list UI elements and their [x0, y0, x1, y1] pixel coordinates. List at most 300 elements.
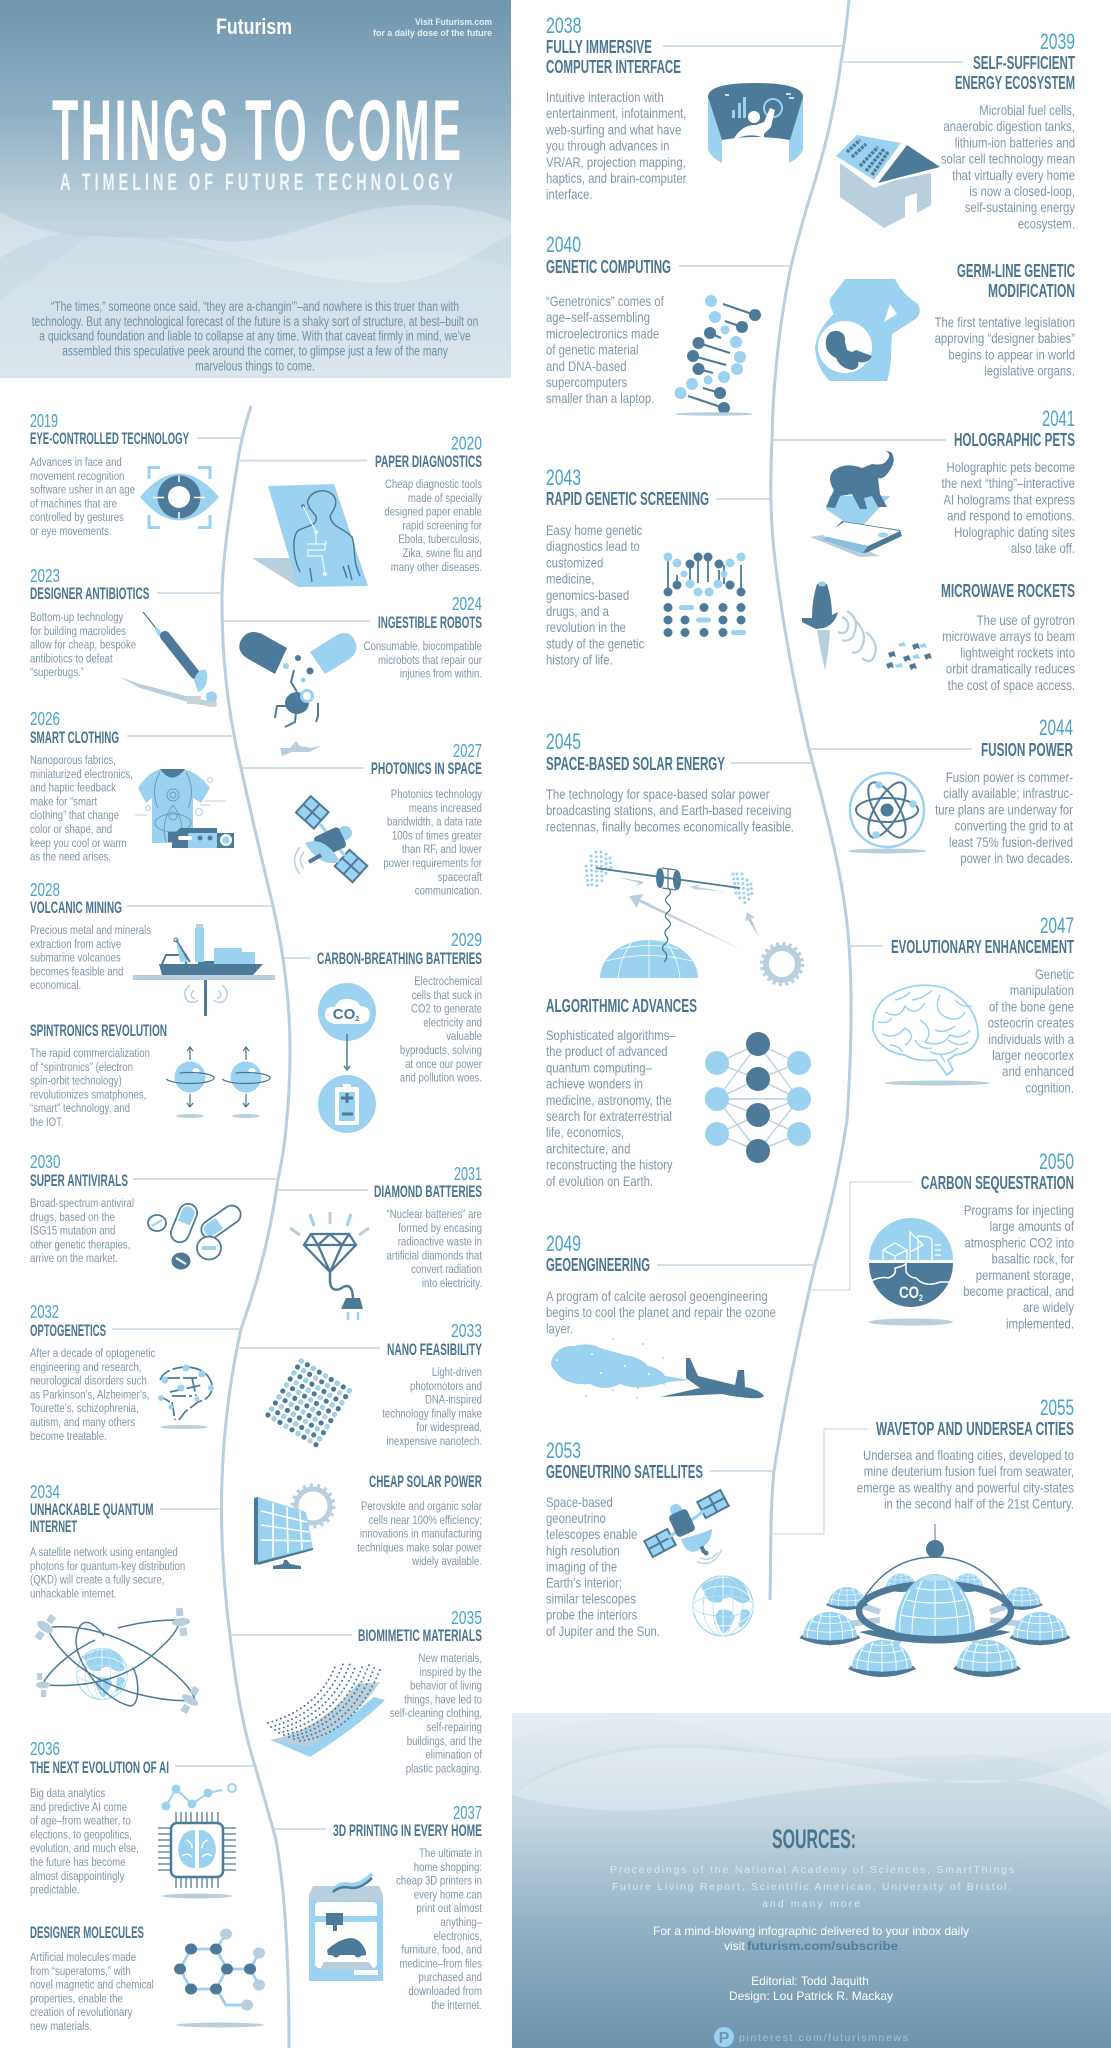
body text: properties, enable the [30, 1992, 123, 2006]
body text: almost disappointingly [30, 1870, 125, 1883]
body text: genomics-based [546, 588, 629, 603]
body text: mine deuterium fusion fuel from seawater, [864, 1464, 1074, 1479]
year and title [546, 1438, 703, 1482]
year and title [30, 879, 122, 917]
body text: of machines that are [30, 497, 117, 511]
body text: Artificial molecules made [30, 1951, 136, 1964]
body text [546, 1289, 776, 1337]
connector [112, 1328, 241, 1330]
body text: of Jupiter and the Sun. [546, 1624, 660, 1639]
body text: individuals with a [988, 1032, 1074, 1047]
body text: Light-driven [432, 1366, 482, 1379]
body text: imaging of the [546, 1559, 617, 1575]
connector [841, 61, 963, 63]
item: 2026 smart clothing [30, 708, 234, 864]
icon: quantum network globe [30, 1607, 205, 1717]
body text: Bottom-up technology [30, 611, 124, 624]
body text: movement recognition [30, 470, 124, 483]
year and title [30, 1151, 128, 1190]
body text: means increased [409, 802, 482, 815]
connector [849, 945, 883, 947]
icon: eye [140, 468, 219, 528]
body text: predictable. [30, 1884, 80, 1897]
year and title: 2020 [451, 432, 482, 454]
body text [546, 523, 644, 668]
body text: and enhanced [1002, 1064, 1074, 1079]
body text: cells near 100% efficiency; [369, 1514, 482, 1527]
body text [30, 754, 133, 864]
body text: osteocrin creates [988, 1016, 1074, 1031]
body text: reconstructing the history [546, 1158, 673, 1173]
credits: Editorial: Todd Jaquith [751, 1974, 869, 1988]
body text: New materials, [419, 1652, 482, 1665]
body text: lithium-ion batteries and [955, 135, 1075, 151]
body text: software usher in an age [30, 484, 135, 497]
body text [30, 924, 152, 993]
item: 2044 fusion power [809, 715, 1073, 866]
body text: smaller than a laptop. [546, 391, 654, 406]
body text: widely available. [411, 1555, 482, 1569]
year and title: THE NEXT EVOLUTION OF AI [30, 1759, 169, 1777]
body text: microelectronics made [546, 326, 659, 342]
body text: solar cell technology mean [941, 152, 1075, 167]
body text: color or shape, and [30, 823, 112, 836]
item: 2030 super antivirals [30, 1151, 278, 1270]
icon: solar house [836, 135, 940, 228]
body text: of “spintronics” (electron [30, 1061, 133, 1074]
year and title [955, 29, 1075, 93]
body text: Space-based [546, 1495, 613, 1510]
body text: Undersea and floating cities, developed to [863, 1448, 1074, 1463]
icon: neural brain [158, 1364, 214, 1429]
year and title: 2050 [1039, 1149, 1074, 1174]
body text: self-repairing [427, 1721, 482, 1734]
year and title [921, 1149, 1074, 1193]
year and title [375, 432, 482, 471]
body text: rectennas, finally becomes economically feasible. [546, 819, 794, 835]
item: 2032 optogenetics [30, 1301, 241, 1443]
body text: furniture, food, and [401, 1944, 482, 1957]
year and title [891, 913, 1074, 957]
sources text: and many more [762, 1898, 860, 1910]
body text: rapid screening for [403, 519, 482, 533]
body text: as Parkinson’s, Alzheimer’s, [30, 1388, 149, 1402]
body text: spin-orbit technology) [30, 1075, 122, 1088]
body text: large amounts of [990, 1219, 1074, 1234]
body text: Holographic pets become [947, 460, 1075, 475]
body text: other genetic therapies, [30, 1238, 130, 1252]
year and title: DIAMOND BATTERIES [374, 1183, 482, 1201]
icon: electron spin spheres [166, 1047, 270, 1118]
icon: carbon sequestration: 2 [919, 1293, 923, 1303]
body text: probe the interiors [546, 1608, 637, 1623]
item: 2031 diamond batteries [278, 1163, 482, 1320]
body text: valuable [446, 1030, 482, 1044]
body text: drugs, based on the [30, 1211, 115, 1224]
body text: that virtually every home [952, 168, 1075, 183]
icon: genomic dot matrix [664, 552, 746, 637]
body text [546, 787, 794, 835]
item: designer molecules [30, 1924, 265, 2033]
body text: become treatable. [30, 1430, 107, 1443]
year and title: 2038 [546, 13, 582, 38]
year and title [876, 1395, 1074, 1439]
body text: inexpensive nanotech. [387, 1435, 482, 1448]
body text: manipulation [1010, 983, 1074, 998]
body text: at once our power [405, 1058, 482, 1071]
body text: formed by encasing [398, 1222, 482, 1235]
heading: sources: SOURCES: [772, 1824, 856, 1854]
intro text: a quicksand foundation and liable to collapse at any time. With that caveat firmly in mind, we’ve [39, 328, 471, 344]
year and title: 2044 [1039, 715, 1073, 740]
connector [133, 1178, 278, 1180]
body text: or eye movements. [30, 525, 112, 538]
body text: techniques make solar power [357, 1541, 482, 1555]
body text: photons for quantum-key distribution [30, 1560, 185, 1573]
body text: home shopping: [414, 1861, 482, 1874]
year and title: 2030 [30, 1151, 60, 1172]
year and title: FULLY IMMERSIVE [546, 36, 652, 57]
body text: emerge as wealthy and powerful city-states [857, 1480, 1074, 1496]
body text: telescopes enable [546, 1527, 637, 1542]
body text [30, 1787, 139, 1897]
item: microwave rockets [802, 580, 1075, 693]
body text: “Genetronics” comes of [546, 294, 664, 309]
body text: and haptic feedback [30, 782, 116, 795]
icon: diamond plug [290, 1212, 369, 1320]
year and title [546, 729, 725, 774]
connector [241, 767, 364, 769]
body text: designed paper enable [384, 506, 482, 519]
item: 2041 holographic pets [772, 406, 1075, 557]
body text [382, 1366, 482, 1448]
icon: brain [873, 985, 990, 1086]
body text: Intuitive interaction with [546, 90, 664, 105]
year and title: EYE-CONTROLLED TECHNOLOGY [30, 430, 189, 448]
year and title: INTERNET [30, 1518, 77, 1536]
year and title: 2041 [1042, 406, 1075, 431]
year and title: COMPUTER INTERFACE [546, 56, 681, 77]
timeline spine: right column [770, 0, 851, 1600]
year and title: 2047 [1040, 913, 1074, 938]
subscribe callout [653, 1924, 969, 1953]
year and title [546, 1231, 650, 1275]
title: CHEAP SOLAR POWER [369, 1473, 482, 1491]
body text [857, 1448, 1074, 1512]
connector [772, 1429, 868, 1534]
intro text [32, 299, 478, 374]
year and title: GEONEUTRINO SATELLITES [546, 1461, 703, 1482]
connector [679, 265, 791, 267]
year and title: SPACE-BASED SOLAR ENERGY [546, 753, 725, 774]
body text: things, have led to [404, 1693, 482, 1707]
year and title: 2033 [451, 1320, 482, 1341]
body text: orbit dramatically reduces [946, 662, 1075, 677]
body text: age–self-assembling [546, 310, 650, 325]
body text: unhackable internet. [30, 1587, 116, 1601]
year and title: 2037 [453, 1802, 482, 1823]
year and title: 2031 [454, 1163, 482, 1184]
year and title: CARBON-BREATHING BATTERIES [317, 950, 482, 968]
year and title: DESIGNER ANTIBIOTICS [30, 585, 150, 603]
body text: “smart” technology, and [30, 1102, 130, 1116]
year and title [387, 1320, 482, 1359]
body text: buildings, and the [407, 1735, 482, 1748]
icon: holographic elephant on phone [810, 451, 902, 557]
title: THINGS TO COME [52, 83, 461, 179]
year and title: GENETIC COMPUTING [546, 256, 671, 277]
intro text: technology. But any technological forecast of the future is a shaky sort of structure, at best–built on [32, 314, 478, 329]
body text: diagnostics lead to [546, 539, 640, 554]
connector [160, 1508, 221, 1510]
body text: (QKD) will create a fully secure, [30, 1574, 164, 1587]
body text: arrive on the market. [30, 1252, 118, 1266]
body text: implemented. [1006, 1316, 1074, 1332]
item: algorithmic advances [546, 995, 811, 1189]
icon: smart shirt and camera [135, 769, 234, 848]
year and title: 3D PRINTING IN EVERY HOME [333, 1822, 482, 1840]
body text: After a decade of optogenetic [30, 1347, 156, 1360]
subscribe callout: futurism.com/subscribe [747, 1939, 898, 1953]
body text: allow for cheap, bespoke [30, 639, 136, 652]
body text: larger neocortex [992, 1048, 1075, 1063]
body text: of age–from weather, to [30, 1815, 131, 1828]
body text: converting the grid to at [955, 819, 1073, 834]
icon: pregnant silhouette with embryo [815, 279, 920, 381]
item: 2043 rapid genetic screening [546, 465, 771, 668]
item: 2027 photonics in space [241, 740, 483, 898]
body text: purchased and [419, 1971, 482, 1985]
body text: Big data analytics [30, 1787, 106, 1800]
year and title [30, 708, 119, 747]
body text: for building macrolides [30, 625, 126, 638]
body text: supercomputers [546, 375, 627, 390]
year and title: 2040 [546, 232, 581, 257]
year and title [546, 465, 709, 509]
year and title: PHOTONICS IN SPACE [371, 760, 482, 778]
body text [942, 460, 1075, 556]
body text [390, 1652, 483, 1776]
body text: innovations in manufacturing [360, 1528, 482, 1541]
year and title: SMART CLOTHING [30, 729, 119, 747]
body text: technology finally make [382, 1407, 482, 1421]
body text: “Nuclear batteries” are [387, 1208, 482, 1221]
year and title: 2029 [451, 929, 482, 950]
body text: elimination of [425, 1749, 483, 1762]
body text: Perovskite and organic solar [361, 1500, 482, 1513]
body text: VR/AR, projection mapping, [546, 155, 686, 170]
item: 2039 self-sufficient energy ecosystem [836, 29, 1076, 232]
title [957, 260, 1075, 301]
item: 2036 next evolution of AI [30, 1738, 255, 1898]
pinterest link [714, 2027, 908, 2047]
icon: biomimetic sheet [268, 1664, 385, 1757]
body text: Sophisticated algorithms– [546, 1028, 676, 1043]
body text: the cost of space access. [948, 678, 1075, 693]
connector [657, 1264, 815, 1266]
body text: The use of gyrotron [977, 613, 1075, 628]
year and title [378, 593, 482, 632]
connector [731, 762, 812, 764]
body text: lightweight rockets into [960, 645, 1075, 661]
year and title: 2036 [30, 1738, 60, 1759]
item: cheap solar power [254, 1473, 482, 1569]
body text [545, 90, 686, 202]
body text: high resolution [546, 1543, 620, 1559]
year and title: BIOMIMETIC MATERIALS [358, 1627, 482, 1645]
year and title: 2032 [30, 1301, 59, 1322]
body text: Ebola, tuberculosis, [398, 533, 482, 547]
body text: make for “smart [30, 795, 97, 809]
body text: atmospheric CO2 into [964, 1235, 1074, 1251]
body text: least 75% fusion-derived [949, 835, 1073, 850]
item: 2037 3D printing in every home [274, 1802, 483, 2012]
connector [278, 1189, 368, 1191]
body text: autism, and many others [30, 1416, 136, 1429]
year and title: 2034 [30, 1481, 60, 1502]
subscribe callout: For a mind-blowing infographic delivered to your inbox daily [653, 1924, 969, 1938]
item: 2029 carbon-breathing batteries [284, 929, 482, 1133]
body text [30, 1951, 154, 2033]
body text: neurological disorders such [30, 1375, 147, 1388]
item: germ-line genetic modification [815, 260, 1075, 381]
body text [400, 975, 482, 1085]
body text: and predictive AI come [30, 1801, 127, 1814]
body text: and DNA-based [546, 359, 627, 374]
icon: CO2 to battery: CO [333, 1006, 355, 1023]
body text [383, 788, 483, 898]
body text: injuries from within. [400, 668, 482, 681]
body text: for widespread, [416, 1421, 482, 1435]
icon: space solar station [586, 852, 802, 984]
body text: of genetic material [546, 343, 639, 358]
icon: mining ship [133, 924, 275, 1016]
body text: anything– [440, 1916, 483, 1929]
body text: keep you cool or warm [30, 837, 127, 850]
body text: miniaturized electronics, [30, 768, 133, 781]
year and title: 2043 [546, 465, 581, 490]
icon: neural network [705, 1032, 811, 1163]
year and title [30, 1738, 169, 1777]
body text: The rapid commercialization [30, 1047, 150, 1060]
body text: begins to cool the planet and repair the ozone [546, 1305, 776, 1320]
icon: capsule and microbot [239, 632, 356, 756]
body text: than RF, and lower [402, 843, 482, 857]
panel: footer [512, 1713, 1111, 2048]
body text: approving “designer babies” [935, 331, 1075, 346]
sources text: Future Living Report, Scientific American, University of Bristol, [612, 1881, 1011, 1893]
body text: Holographic dating sites [954, 525, 1075, 540]
body text: AI holograms that express [943, 492, 1075, 508]
body text: interface. [546, 187, 593, 202]
pinterest link: P [719, 2030, 730, 2047]
body text: becomes feasible and [30, 965, 123, 979]
visit link: for a daily dose of the future [373, 28, 492, 38]
body text: ecosystem. [1018, 216, 1075, 232]
icon: immersive display [708, 83, 803, 163]
icon: floating city [799, 1524, 1071, 1677]
item: 2024 ingestible robots [224, 593, 482, 756]
body text: The first tentative legislation [935, 315, 1075, 330]
item: 2049 geoengineering [546, 1231, 815, 1399]
body text: Consumable, biocompatible [364, 640, 482, 653]
body text: The ultimate in [419, 1847, 482, 1860]
body text: begins to appear in world [948, 347, 1075, 363]
year and title: UNHACKABLE QUANTUM [30, 1501, 154, 1519]
icon: syringe [120, 612, 217, 707]
item: 2034 unhackable quantum internet [30, 1481, 221, 1717]
body text: geoneutrino [546, 1511, 606, 1526]
connector [239, 1347, 380, 1349]
year and title: 2027 [453, 740, 482, 761]
body text: creation of revolutionary [30, 2006, 133, 2020]
year and title: NANO FEASIBILITY [387, 1341, 482, 1359]
body text: permanent storage, [976, 1268, 1074, 1283]
body text: elections, to geopolitics, [30, 1828, 132, 1842]
year and title: RAPID GENETIC SCREENING [546, 488, 709, 509]
body text: 100s of times greater [392, 829, 482, 843]
body text: Precious metal and minerals [30, 924, 152, 937]
item: 2055 wavetop and undersea cities [772, 1395, 1074, 1677]
body text [935, 315, 1075, 379]
connector [224, 620, 370, 622]
year and title: 2053 [546, 1438, 581, 1463]
item: 2020 paper diagnostics [238, 432, 483, 587]
body text: are widely [1023, 1300, 1075, 1315]
body text: new materials. [30, 2020, 92, 2033]
year and title [371, 740, 482, 778]
body text: you through advances in [546, 139, 669, 154]
body text: and respond to emotions. [947, 509, 1075, 524]
body text: web-surfing and what have [545, 122, 681, 138]
body text: Broad-spectrum antiviral [30, 1197, 134, 1210]
body text [30, 456, 135, 538]
intro text: marvelous things to come. [195, 358, 315, 374]
body text: the product of advanced [546, 1044, 668, 1059]
body text: every home can [414, 1888, 482, 1902]
intro text: assembled this speculative peek around the corner, to glimpse just a few of the many [62, 343, 448, 359]
body text: revolution in the [546, 620, 626, 635]
body text: Advances in face and [30, 456, 122, 469]
body text: of evolution on Earth. [546, 1174, 653, 1189]
body text: self-sustaining energy [965, 200, 1076, 215]
body text: plastic packaging. [406, 1762, 482, 1776]
body text: Zika, swine flu and [403, 547, 482, 560]
body text [988, 967, 1075, 1096]
body text: Nanoporous fabrics, [30, 754, 116, 767]
body text: architecture, and [546, 1141, 630, 1157]
body text: many other diseases. [391, 561, 482, 574]
body text: medicine, [546, 572, 594, 587]
connector [274, 1828, 326, 1830]
body text: the IOT. [30, 1116, 64, 1129]
body text: print out almost [416, 1902, 482, 1916]
body text: spacecraft [438, 871, 482, 884]
connector [810, 1182, 913, 1290]
visit link [373, 17, 492, 38]
subtitle: A TIMELINE OF FUTURE TECHNOLOGY [60, 169, 453, 196]
year and title [333, 1802, 482, 1840]
icon: nano dot lattice [268, 1361, 355, 1448]
body text: the next “thing”–interactive [942, 476, 1075, 491]
body text: into electricity. [422, 1277, 482, 1290]
body text: clothing” that change [30, 809, 119, 823]
body text: Electrochemical [414, 975, 482, 988]
item: 2033 nano feasibility [239, 1320, 482, 1448]
body text: bandwidth, a data rate [387, 816, 482, 829]
body text: revolutionizes smatphones, [30, 1088, 146, 1102]
body text [30, 1197, 134, 1266]
